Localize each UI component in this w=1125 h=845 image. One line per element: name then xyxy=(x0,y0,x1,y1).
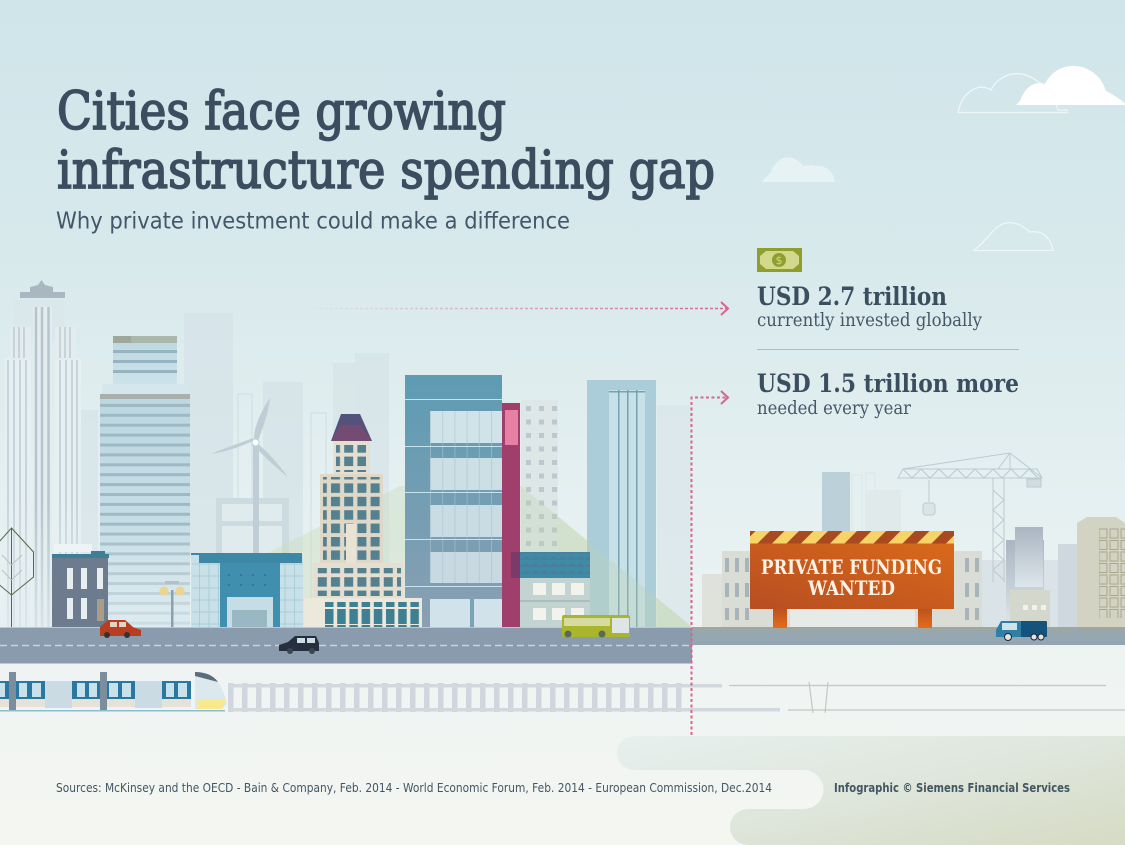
sources: Sources: McKinsey and the OECD - Bain & Company, Feb. 2014 - World Economic Forum, Feb. 2014 - European Commission, Dec.2014 xyxy=(56,781,772,795)
title: infrastructure spending gap xyxy=(57,141,715,201)
icon: banknote xyxy=(757,248,802,272)
train xyxy=(0,672,227,712)
low scalloped roof building xyxy=(511,552,590,627)
sign: private funding wanted xyxy=(750,531,954,628)
hazard stripe xyxy=(750,531,954,544)
beige stepped tower xyxy=(304,414,422,627)
clouds xyxy=(762,66,1125,251)
gray townhouse xyxy=(52,544,109,627)
stat: funding needed xyxy=(757,369,1019,419)
railway track xyxy=(228,682,1125,713)
construction crane xyxy=(898,453,1042,582)
stat: currently invested xyxy=(757,282,982,331)
sign text: PRIVATE FUNDING xyxy=(761,555,942,579)
hill shade over right towers xyxy=(521,486,692,627)
black car xyxy=(279,636,319,654)
subtitle: Why private investment could make a difference xyxy=(56,208,570,234)
title: Cities face growing xyxy=(57,82,506,142)
hazy background skyline xyxy=(14,300,691,627)
cloud outline small xyxy=(974,223,1053,250)
blue truck xyxy=(996,621,1047,640)
credit: Infographic © Siemens Financial Services xyxy=(834,781,1070,795)
stat: currently invested: currently invested globally xyxy=(757,310,982,331)
stat: funding needed: USD 1.5 trillion more xyxy=(757,369,1019,398)
cloud solid white xyxy=(1016,66,1125,105)
title xyxy=(57,82,715,201)
sign board xyxy=(750,543,954,609)
green hill xyxy=(250,486,692,627)
icon: banknote: $ xyxy=(776,254,782,267)
striped office tower xyxy=(100,336,190,627)
blue glass tower xyxy=(405,375,502,627)
divider xyxy=(757,349,1019,350)
arrow: invested xyxy=(300,302,728,315)
red car xyxy=(100,620,141,638)
teal low building xyxy=(191,553,303,627)
magenta tower strip xyxy=(502,403,520,627)
sign text: WANTED xyxy=(807,576,895,600)
sign legs xyxy=(773,609,932,628)
gray window tower xyxy=(521,400,558,555)
stat: currently invested: USD 2.7 trillion xyxy=(757,282,947,311)
tree xyxy=(0,528,34,627)
cloud small pale xyxy=(762,157,835,182)
footer ribbon xyxy=(617,736,1125,845)
street lamp xyxy=(160,581,184,627)
sign text xyxy=(761,555,942,600)
green bus xyxy=(562,615,630,638)
cloud outline large xyxy=(958,74,1067,112)
main road xyxy=(0,628,692,664)
stat: funding needed: needed every year xyxy=(757,398,911,419)
art deco tower xyxy=(0,280,100,627)
connector arrow: needed xyxy=(692,391,728,735)
right construction skyline xyxy=(702,472,1125,627)
wind turbine xyxy=(211,398,288,553)
light blue tower xyxy=(587,380,656,627)
right road xyxy=(692,627,1125,645)
